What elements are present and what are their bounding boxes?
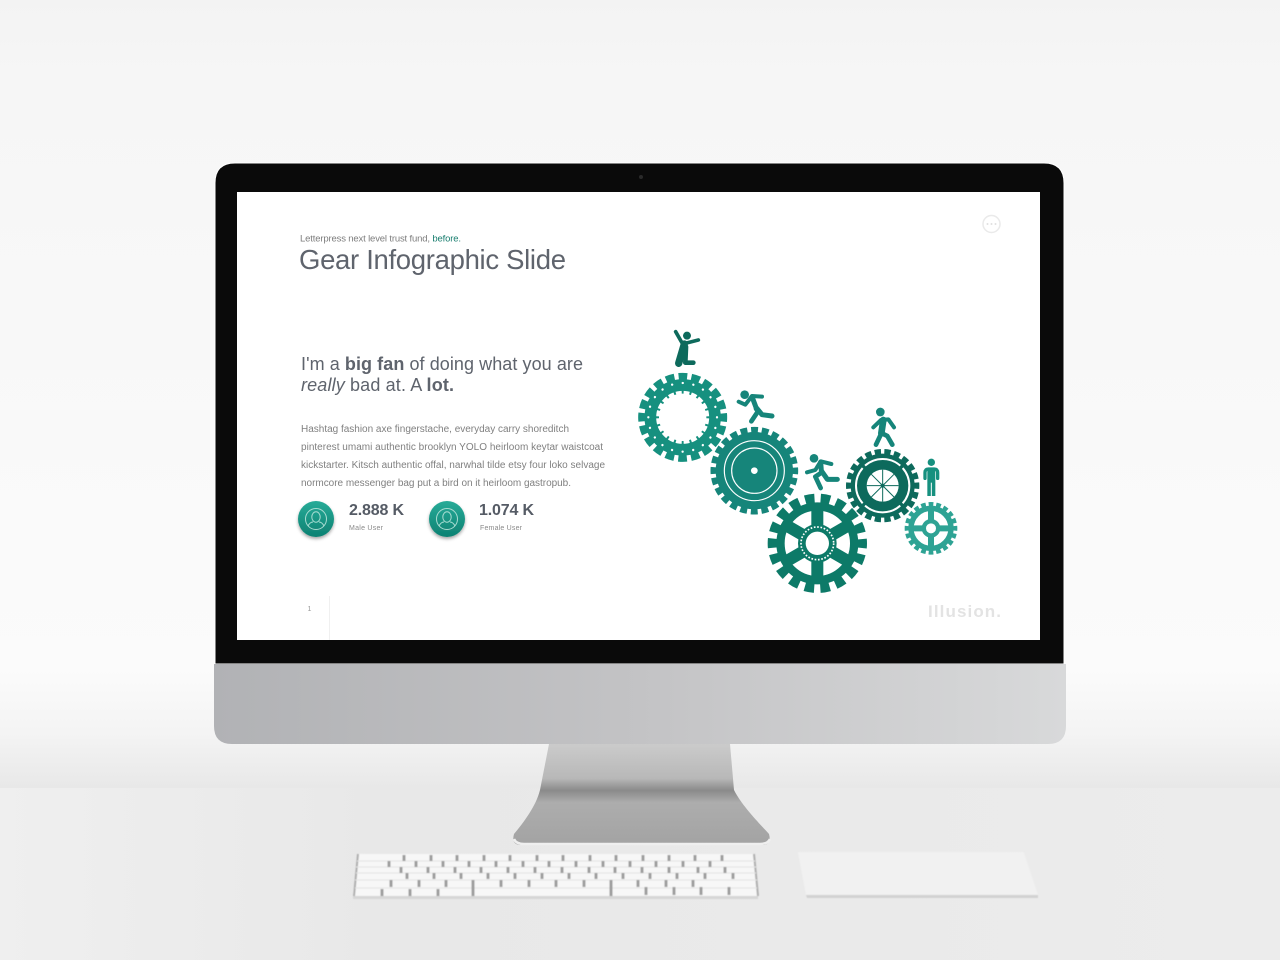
gear 4 bbox=[849, 452, 917, 520]
keyboard body bbox=[353, 854, 758, 899]
gear infographic bbox=[642, 332, 955, 588]
value: 1.074 K bbox=[479, 502, 534, 519]
figure: standing person bbox=[925, 459, 938, 497]
trackpad bbox=[799, 853, 1038, 898]
gear 2 bbox=[713, 430, 795, 512]
body paragraph bbox=[301, 424, 605, 489]
keyboard bbox=[353, 854, 758, 899]
monitor stand bbox=[513, 744, 770, 845]
key row lines bbox=[355, 861, 757, 888]
headline bbox=[301, 354, 583, 395]
body paragraph: pinterest umami authentic brooklyn YOLO heirloom keytar waistcoat bbox=[301, 442, 603, 453]
body paragraph: kickstarter. Kitsch authentic offal, narwhal tilde etsy four loko selvage bbox=[301, 460, 605, 471]
label: Male User bbox=[349, 525, 384, 532]
body paragraph: Hashtag fashion axe fingerstache, everyday carry shoreditch bbox=[301, 424, 569, 435]
headline: really bad at. A lot. bbox=[301, 375, 454, 395]
key gaps bbox=[382, 855, 733, 896]
icon: female user bbox=[429, 501, 465, 537]
monitor bbox=[214, 163, 1066, 744]
figure: runner on gear 3 bbox=[807, 454, 837, 488]
gear 5 bbox=[907, 504, 955, 552]
stat: female user bbox=[429, 501, 534, 537]
brand mark: Illusion. bbox=[928, 602, 1001, 621]
value: 2.888 K bbox=[349, 502, 404, 519]
figure: walking person bbox=[873, 408, 894, 445]
body paragraph: normcore messenger bag put a bird on it heirloom gastropub. bbox=[301, 478, 571, 489]
label: Female User bbox=[480, 525, 523, 532]
screen bbox=[237, 192, 1040, 640]
monitor bezel bbox=[215, 163, 1064, 664]
page number: 1 bbox=[308, 606, 312, 613]
gear 3 bbox=[772, 498, 862, 588]
stand base edge highlight bbox=[514, 839, 770, 844]
figure: jumping person bbox=[676, 332, 698, 363]
title: Gear Infographic Slide bbox=[299, 244, 566, 275]
background: desk bbox=[0, 788, 1280, 960]
stat: male user bbox=[298, 501, 404, 537]
slide menu icon bbox=[983, 216, 1000, 232]
monitor chin bbox=[214, 664, 1066, 744]
camera bbox=[639, 175, 643, 179]
figure: runner on gear 2 bbox=[739, 390, 772, 421]
trackpad edge bbox=[806, 895, 1038, 898]
footer divider bbox=[329, 596, 330, 640]
keyboard side edges bbox=[354, 854, 758, 896]
keyboard front edge bbox=[353, 896, 758, 899]
headline: I'm a big fan of doing what you are bbox=[301, 354, 583, 374]
gear 1 bbox=[642, 376, 724, 458]
icon: male user bbox=[298, 501, 334, 537]
kicker text: Letterpress next level trust fund, before. bbox=[300, 234, 461, 244]
